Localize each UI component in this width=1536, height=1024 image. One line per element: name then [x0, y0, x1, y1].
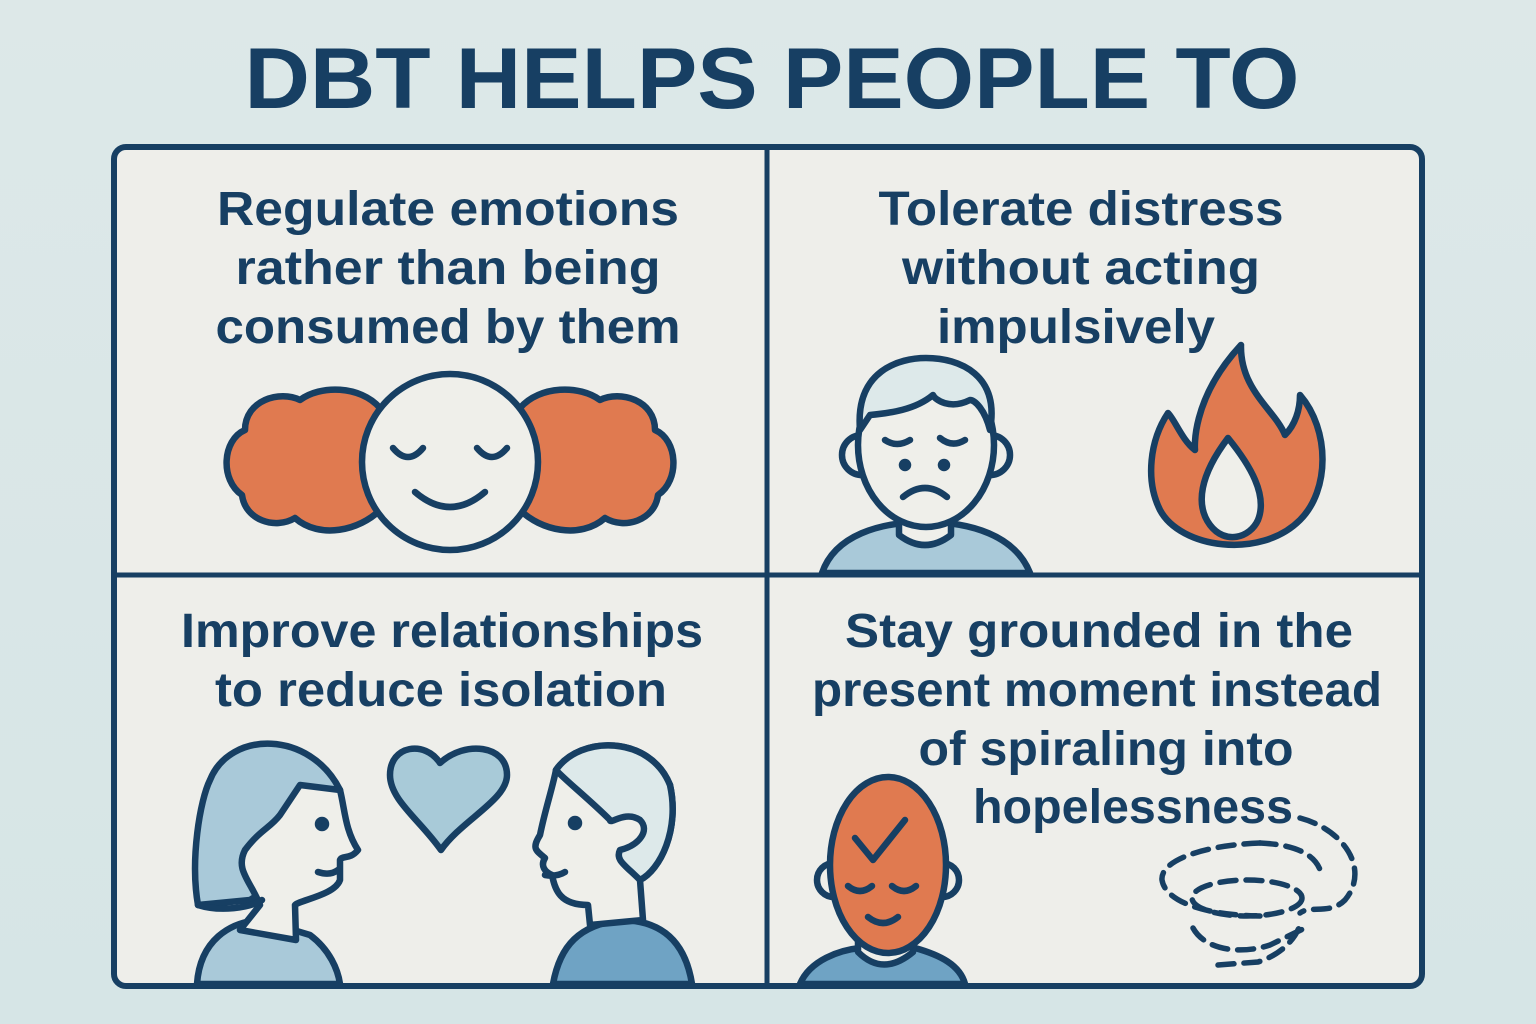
- title: DBT HELPS PEOPLE TO: [244, 31, 1300, 127]
- heading: tolerate distress: impulsively: [937, 301, 1215, 354]
- heading: improve relationships: to reduce isolation: [215, 664, 667, 717]
- heading: stay grounded: of spiraling into: [918, 723, 1294, 776]
- icon: woman: [195, 744, 358, 984]
- heading: improve relationships: Improve relationships: [181, 605, 703, 658]
- icon: dashed spiral: [1162, 818, 1355, 965]
- icon: calm face between clouds: [227, 374, 673, 550]
- panel: improve relationships: [181, 605, 703, 984]
- heading: tolerate distress: [878, 183, 1284, 354]
- icon: flame: [1151, 345, 1322, 545]
- heading: stay grounded: hopelessness: [973, 781, 1293, 834]
- heading: stay grounded: present moment instead: [812, 664, 1382, 717]
- icon: heart: [390, 749, 507, 850]
- icon: calm person with check: [800, 777, 965, 984]
- heading: improve relationships: [181, 605, 703, 717]
- icon: man: [535, 745, 692, 984]
- panel: tolerate distress: [822, 183, 1322, 573]
- heading: tolerate distress: Tolerate distress: [878, 183, 1284, 236]
- heading: regulate emotions: [216, 183, 680, 354]
- panel: stay grounded: [800, 605, 1382, 984]
- heading: regulate emotions: rather than being: [236, 242, 660, 295]
- heading: stay grounded: Stay grounded in the: [845, 605, 1353, 658]
- panel: regulate emotions: [216, 183, 680, 550]
- icon: sad person: [822, 358, 1030, 573]
- frame panel grid: [114, 147, 1422, 986]
- heading: stay grounded: [812, 605, 1382, 834]
- heading: regulate emotions: Regulate emotions: [217, 183, 679, 236]
- heading: tolerate distress: without acting: [901, 242, 1260, 295]
- heading: regulate emotions: consumed by them: [216, 301, 680, 354]
